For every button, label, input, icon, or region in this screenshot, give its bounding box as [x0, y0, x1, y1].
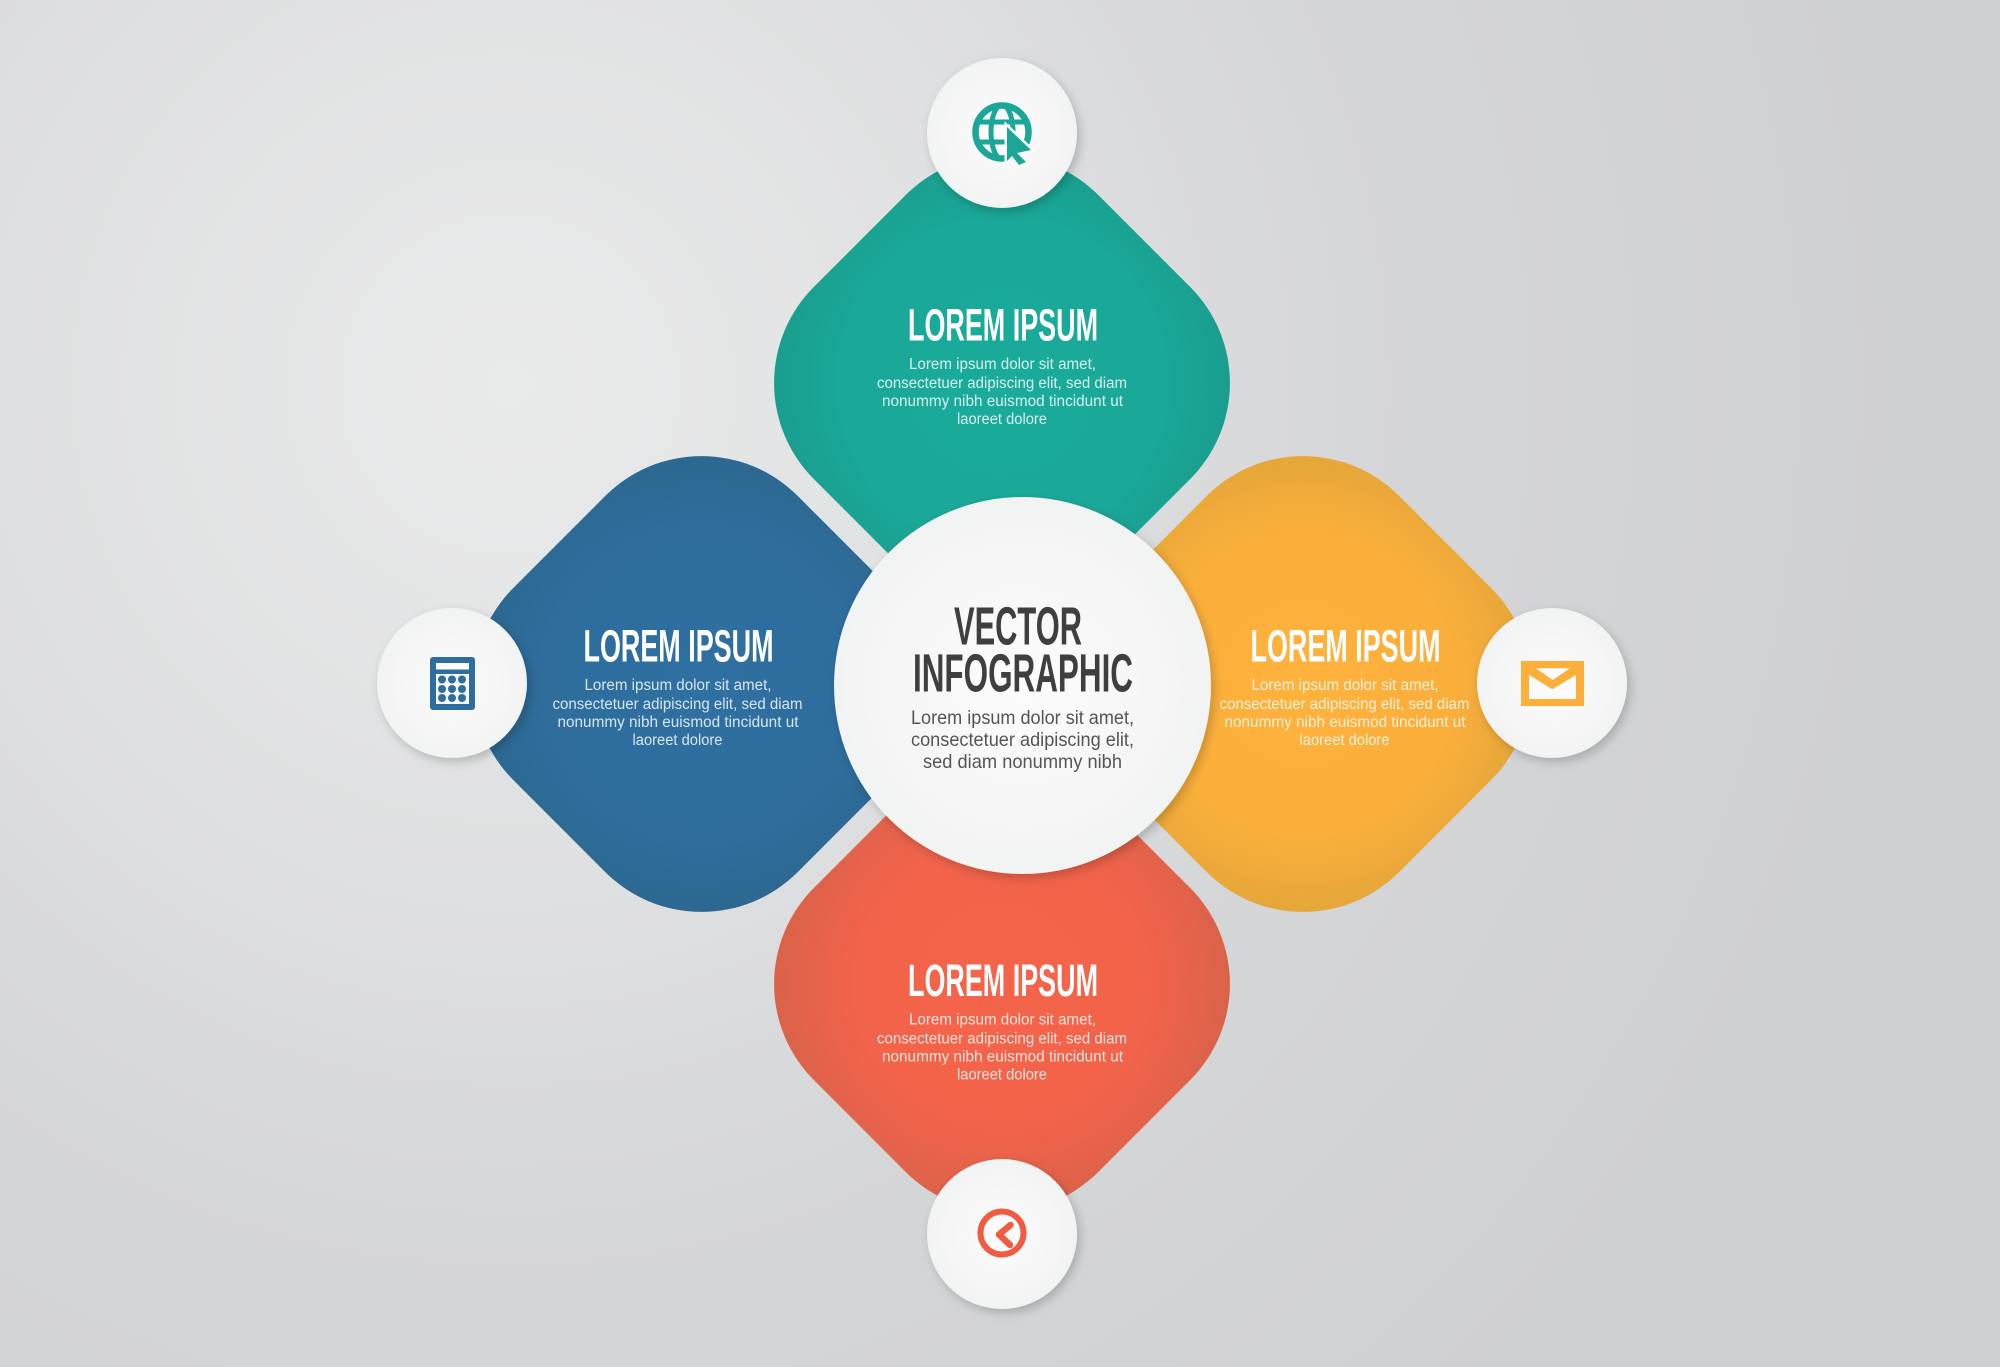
text block: bottom	[877, 1012, 1127, 1084]
center text block: sed diam nonummy nibh	[923, 751, 1122, 773]
panel: top teal diamond	[718, 99, 1286, 667]
panel: right orange diamond	[1019, 400, 1587, 968]
panel: bottom red diamond	[718, 700, 1286, 1268]
right panel text	[1220, 620, 1470, 749]
text block: left: consectetuer adipiscing elit, sed diam	[552, 696, 802, 713]
text block: right: nonummy nibh euismod tincidunt ut	[1224, 714, 1466, 731]
text block: right	[1220, 677, 1470, 749]
heading: right: LOREM IPSUM	[1250, 620, 1440, 672]
icon: envelope	[1521, 661, 1584, 706]
icon circle: right	[1477, 608, 1627, 758]
icon circle: left	[377, 608, 527, 758]
text block: top: Lorem ipsum dolor sit amet,	[909, 356, 1096, 373]
left panel text	[552, 620, 802, 749]
text block: top	[877, 356, 1127, 428]
text block: bottom: laoreet dolore	[957, 1066, 1047, 1084]
icon: calculator	[430, 657, 475, 710]
text block: top: nonummy nibh euismod tincidunt ut	[882, 393, 1124, 410]
icon circle: top	[927, 58, 1077, 208]
text block: left: laoreet dolore	[632, 732, 722, 749]
top panel text	[877, 300, 1127, 428]
heading: top: LOREM IPSUM	[908, 300, 1098, 350]
text block: right: laoreet dolore	[1300, 732, 1390, 749]
center circle	[834, 497, 1211, 874]
text block: bottom: Lorem ipsum dolor sit amet,	[909, 1012, 1096, 1028]
text block: bottom: consectetuer adipiscing elit, sed diam	[877, 1030, 1127, 1048]
text block: top: laoreet dolore	[957, 411, 1047, 428]
title: VECTOR	[954, 596, 1082, 656]
text block: top: consectetuer adipiscing elit, sed diam	[877, 375, 1127, 392]
text block: left: nonummy nibh euismod tincidunt ut	[558, 714, 799, 731]
center text block: Lorem ipsum dolor sit amet,	[911, 707, 1134, 729]
icon circle: bottom	[927, 1159, 1077, 1309]
text block: left	[552, 677, 802, 749]
icon: globe with cursor	[976, 105, 1031, 165]
center text block	[911, 707, 1134, 773]
title: INFOGRAPHIC	[913, 644, 1133, 704]
title	[913, 596, 1133, 704]
panel: left blue diamond	[417, 400, 986, 968]
bottom panel text	[877, 955, 1127, 1084]
heading: bottom: LOREM IPSUM	[908, 955, 1098, 1006]
text block: left: Lorem ipsum dolor sit amet,	[584, 677, 772, 694]
heading: left: LOREM IPSUM	[584, 620, 774, 672]
icon: back arrow in circle	[980, 1212, 1024, 1254]
center text block: consectetuer adipiscing elit,	[911, 729, 1134, 751]
text block: right: Lorem ipsum dolor sit amet,	[1252, 677, 1438, 694]
text block: bottom: nonummy nibh euismod tincidunt ut	[882, 1048, 1124, 1066]
text block: right: consectetuer adipiscing elit, sed diam	[1220, 696, 1470, 713]
